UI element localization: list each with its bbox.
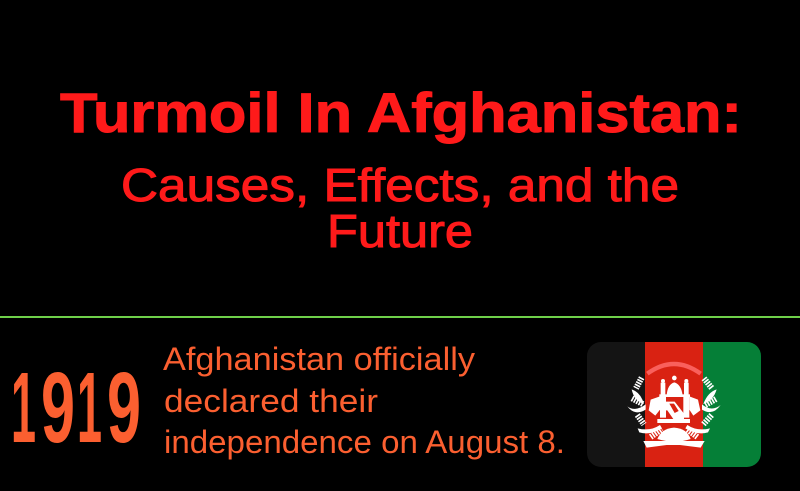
- icon: national emblem: [627, 364, 721, 448]
- year 1919: 1: [11, 352, 36, 464]
- title: Turmoil In Afghanistan:: [60, 81, 742, 144]
- infographic canvas: [0, 91, 800, 467]
- independence description: Afghanistan officially: [163, 341, 475, 377]
- year 1919: [11, 352, 141, 464]
- icon: Afghan flag: [587, 342, 761, 467]
- year 1919: 9: [107, 352, 141, 464]
- independence description: declared their: [164, 383, 378, 419]
- subtitle: Future: [327, 205, 473, 257]
- subtitle: Causes, Effects, and the: [121, 159, 679, 211]
- year 1919: 9: [41, 352, 75, 464]
- independence description: independence on August 8.: [164, 424, 565, 460]
- independence description: [163, 341, 565, 460]
- year 1919: 1: [77, 352, 102, 464]
- subtitle: [121, 159, 679, 257]
